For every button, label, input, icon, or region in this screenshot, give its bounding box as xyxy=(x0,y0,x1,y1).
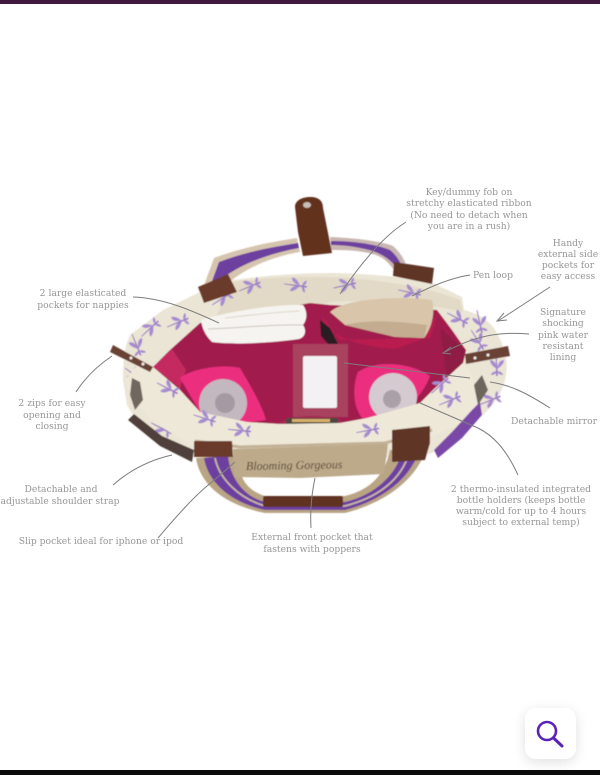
label: key fob: stretchy elasticated ribbon xyxy=(406,198,532,209)
label: lining: pink water xyxy=(538,330,589,341)
label: lining: shocking xyxy=(542,318,584,329)
tan zip edge xyxy=(195,430,432,447)
shoulder strap clips xyxy=(128,375,488,462)
line: nappies xyxy=(133,297,219,323)
label: side pockets: easy access xyxy=(541,271,595,282)
label: lining: resistant xyxy=(543,341,584,352)
bag body xyxy=(123,273,507,458)
label: key fob: you are in a rush) xyxy=(427,221,510,232)
label: slip pocket: Slip pocket ideal for iphone or ipod xyxy=(19,536,183,547)
leather fob tab xyxy=(295,197,332,256)
top handle xyxy=(203,237,407,288)
left bottle holder xyxy=(180,366,266,427)
label: nappies pockets: pockets for nappies xyxy=(37,300,129,311)
mirror xyxy=(293,344,348,417)
line: zips xyxy=(76,356,112,392)
line: pen loop xyxy=(412,275,470,296)
dragonfly print xyxy=(121,276,504,440)
arrow: lining xyxy=(443,333,529,354)
bottom leather handle xyxy=(263,496,343,507)
line: bottle holders xyxy=(420,403,518,475)
label: mirror: Detachable mirror xyxy=(511,416,598,427)
phone in slip pocket xyxy=(278,416,345,432)
bottom bar xyxy=(0,770,600,775)
label: external front pocket: External front pocket that xyxy=(251,532,373,543)
line: mirror xyxy=(344,363,550,408)
label: side pockets: Handy xyxy=(553,238,584,249)
leader lines xyxy=(76,222,550,538)
leather buckle front left xyxy=(194,441,233,457)
label: side pockets: external side xyxy=(538,249,598,260)
label: key fob: (No need to detach when xyxy=(410,210,528,221)
label: lining: Signature xyxy=(540,307,586,318)
label: bottle holders: warm/cold for up to 4 hours xyxy=(456,506,586,517)
label: side pockets: pockets for xyxy=(542,260,595,271)
wipes packet xyxy=(322,298,437,349)
label: shoulder strap: adjustable shoulder strap xyxy=(0,496,120,507)
line: front pocket xyxy=(311,478,315,528)
label: pen loop: Pen loop xyxy=(473,270,513,281)
nappies xyxy=(201,305,306,343)
purple side strap xyxy=(434,402,482,458)
label: bottle holders: bottle holders (keeps bottle xyxy=(457,495,585,506)
arrow: side pockets xyxy=(497,287,550,321)
search button xyxy=(525,708,576,759)
line: fob xyxy=(340,222,406,294)
front handle strap xyxy=(196,450,425,513)
back wall shade xyxy=(215,277,463,318)
zip pull charm xyxy=(320,320,338,346)
label: zips: opening and xyxy=(23,410,81,421)
label: external front pocket: fastens with poppers xyxy=(263,544,361,555)
leather buckle top left xyxy=(198,274,237,303)
top bar xyxy=(0,0,600,4)
label: bottle holders: 2 thermo-insulated integrated xyxy=(451,484,591,495)
front lip xyxy=(125,362,478,449)
right bottle holder xyxy=(354,364,430,421)
front print xyxy=(154,373,463,439)
label: nappies pockets: 2 large elasticated xyxy=(40,288,126,299)
label: zips: closing xyxy=(35,421,69,432)
leather buckle top right xyxy=(393,262,434,284)
label: shoulder strap: Detachable and xyxy=(25,484,98,495)
front label patch: Blooming Gorgeous: Blooming Gorgeous xyxy=(246,457,343,473)
left side tab xyxy=(110,345,153,372)
label: lining: lining xyxy=(550,352,576,363)
label: zips: 2 zips for easy xyxy=(18,398,86,409)
line: shoulder strap xyxy=(113,455,172,485)
label: bottle holders: subject to external temp) xyxy=(462,517,580,528)
label: key fob: Key/dummy fob on xyxy=(426,187,513,198)
bag photo xyxy=(110,197,510,513)
pink lining xyxy=(153,303,466,425)
front label patch: Blooming Gorgeous xyxy=(233,444,388,478)
right side tab xyxy=(465,346,510,364)
line: slip pocket xyxy=(158,462,235,538)
leather buckle front right xyxy=(392,426,430,462)
